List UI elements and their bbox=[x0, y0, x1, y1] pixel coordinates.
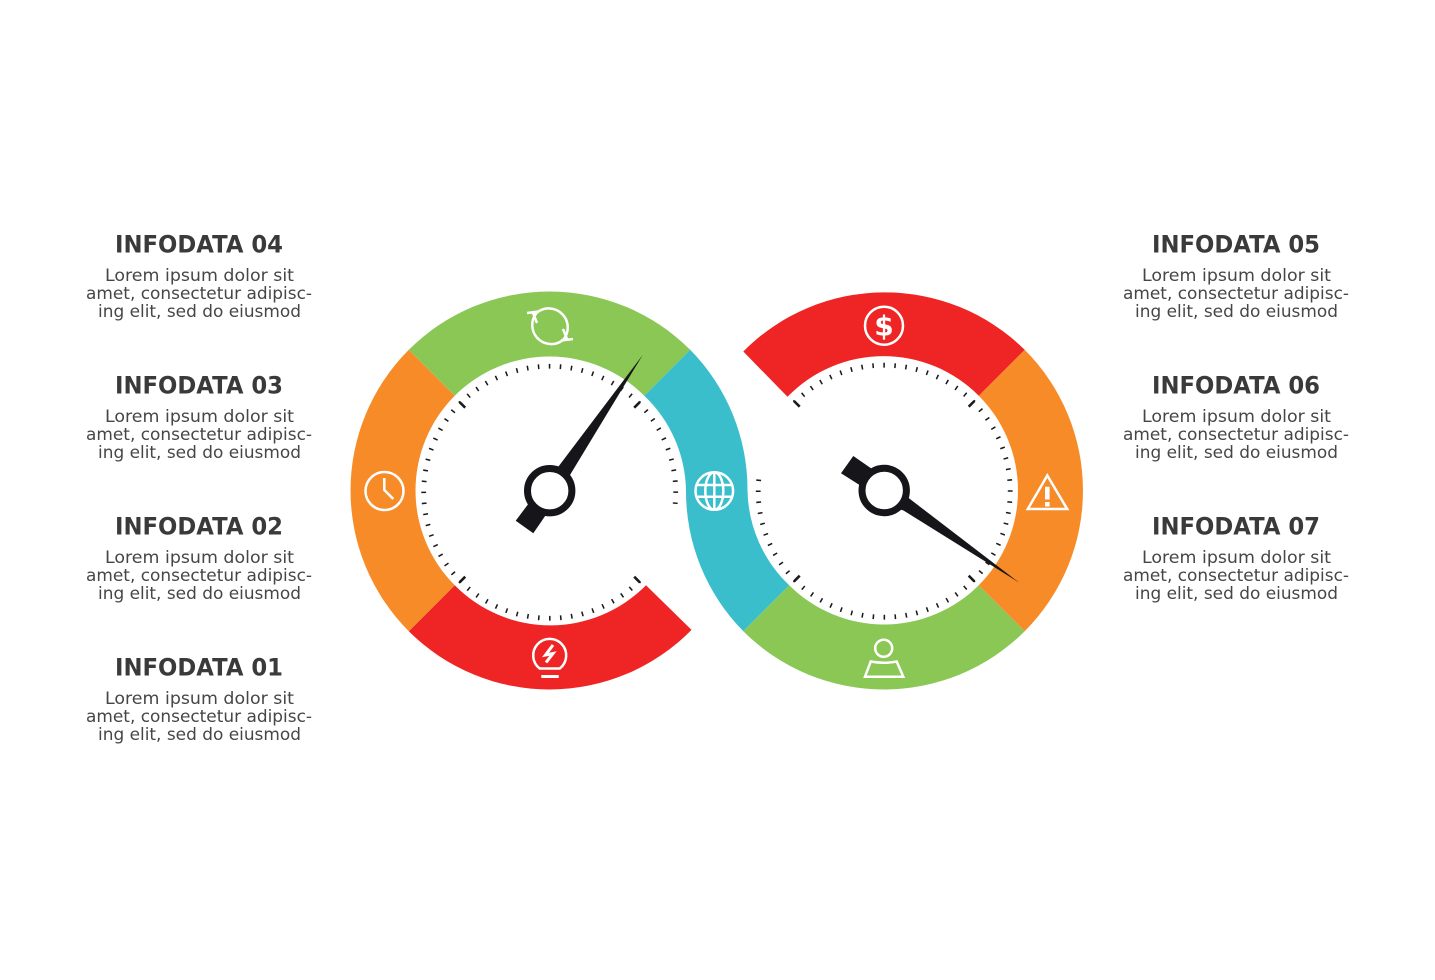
segment: teal S-curve bbox=[644, 350, 789, 631]
gauge ticks: right dial bbox=[758, 365, 1010, 617]
text block: infodata 04 bbox=[86, 230, 312, 321]
text block: infodata 02: ing elit, sed do eiusmod bbox=[98, 584, 301, 603]
icon: light bulb bbox=[533, 639, 566, 676]
text block: infodata 01: amet, consectetur adipisc- bbox=[86, 707, 312, 726]
text block: infodata 04: amet, consectetur adipisc- bbox=[86, 284, 312, 303]
text block: infodata 06: ing elit, sed do eiusmod bbox=[1135, 443, 1338, 462]
text block: infodata 06: amet, consectetur adipisc- bbox=[1123, 425, 1349, 444]
text block: infodata 07: Lorem ipsum dolor sit bbox=[1142, 548, 1332, 567]
text block: infodata 07: INFODATA 07 bbox=[1152, 512, 1320, 540]
text block: infodata 04: INFODATA 04 bbox=[115, 230, 283, 258]
icon: globe bbox=[696, 472, 733, 510]
text block: infodata 07: ing elit, sed do eiusmod bbox=[1135, 584, 1338, 603]
segment: left green bbox=[409, 292, 690, 396]
text block: infodata 03: INFODATA 03 bbox=[115, 372, 283, 400]
text block: infodata 05: Lorem ipsum dolor sit bbox=[1142, 266, 1332, 285]
needle: left dial bbox=[516, 355, 643, 533]
text block: infodata 01: INFODATA 01 bbox=[115, 654, 283, 682]
text block: infodata 06 bbox=[1123, 372, 1349, 462]
icon: dollar: $ bbox=[874, 310, 894, 342]
text block: infodata 03: ing elit, sed do eiusmod bbox=[98, 443, 301, 462]
text block: infodata 03: amet, consectetur adipisc- bbox=[86, 425, 312, 444]
text block: infodata 02 bbox=[86, 512, 312, 603]
text block: infodata 06: INFODATA 06 bbox=[1152, 372, 1320, 400]
text block: infodata 02: amet, consectetur adipisc- bbox=[86, 566, 312, 585]
icon: warning triangle bbox=[1028, 476, 1067, 509]
text block: infodata 05: amet, consectetur adipisc- bbox=[1123, 284, 1349, 303]
text block: infodata 02: Lorem ipsum dolor sit bbox=[105, 548, 295, 567]
text block: infodata 07: amet, consectetur adipisc- bbox=[1123, 566, 1349, 585]
icon: sync arrows bbox=[527, 308, 573, 344]
text block: infodata 03: Lorem ipsum dolor sit bbox=[105, 407, 295, 426]
segment: right orange bbox=[979, 350, 1083, 631]
segment: right green bbox=[743, 585, 1025, 689]
text block: infodata 03 bbox=[86, 372, 312, 462]
text block: infodata 04: Lorem ipsum dolor sit bbox=[105, 266, 295, 285]
text block: infodata 01 bbox=[86, 654, 312, 744]
text block: infodata 02: INFODATA 02 bbox=[115, 512, 283, 540]
text block: infodata 05 bbox=[1123, 230, 1349, 321]
text block: infodata 06: Lorem ipsum dolor sit bbox=[1142, 407, 1332, 426]
text block: infodata 01: ing elit, sed do eiusmod bbox=[98, 725, 301, 744]
gauge ticks: left dial bbox=[424, 366, 676, 618]
icon: dollar bbox=[865, 307, 903, 345]
text block: infodata 05: ing elit, sed do eiusmod bbox=[1135, 302, 1338, 321]
text block: infodata 05: INFODATA 05 bbox=[1152, 230, 1320, 258]
text block: infodata 07 bbox=[1123, 512, 1349, 603]
text block: infodata 04: ing elit, sed do eiusmod bbox=[98, 302, 301, 321]
icon: person on map bbox=[865, 640, 903, 677]
panel: infinity band bbox=[351, 292, 1083, 689]
segment: left orange bbox=[351, 350, 455, 631]
segment: right red bbox=[743, 292, 1025, 397]
icon: clock bbox=[366, 472, 404, 510]
needle: right dial bbox=[841, 456, 1019, 583]
text block: infodata 01: Lorem ipsum dolor sit bbox=[105, 689, 295, 708]
segment: left red bbox=[409, 585, 692, 689]
